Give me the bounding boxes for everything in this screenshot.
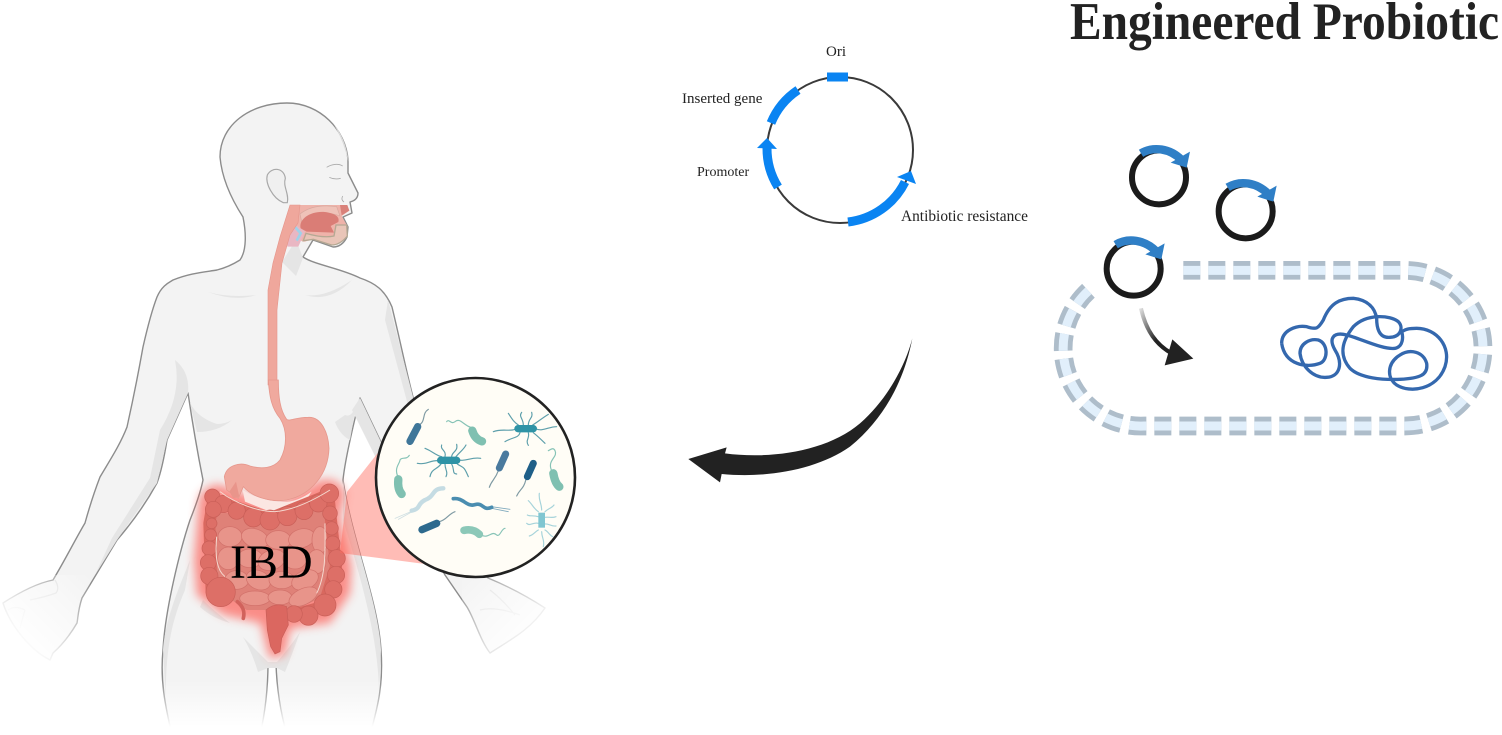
head shading (333, 123, 348, 162)
colon backing (209, 495, 336, 615)
panel: gut microbiome magnifier (376, 378, 575, 577)
bean bacterium 2 (548, 449, 559, 487)
bean bacterium 1 (447, 420, 482, 441)
magnifier cone (340, 440, 425, 564)
head details (267, 123, 349, 247)
rod bacterium 1 (410, 409, 428, 441)
plasmid 3 (1107, 240, 1165, 296)
jaw (303, 225, 347, 245)
tongue (300, 212, 339, 233)
colon (200, 484, 345, 625)
plasmid segments (767, 77, 905, 222)
large curved arrow (688, 338, 912, 482)
appendix (237, 602, 244, 618)
plasmid ring (767, 77, 913, 223)
small intestine (208, 510, 335, 610)
rod bacterium 4 (422, 512, 455, 530)
mouth and throat (290, 205, 349, 245)
rectum (266, 605, 288, 654)
panel: plasmid map (682, 44, 1028, 225)
label: Ori: Ori (826, 44, 846, 60)
larynx (287, 223, 305, 247)
stomach (224, 380, 329, 501)
pale peritrichous bacterium (527, 493, 556, 547)
panel: engineered bacterium (1063, 149, 1483, 426)
hand details (8, 580, 520, 628)
fade overlays (0, 575, 552, 735)
body shading (95, 240, 420, 700)
label: Antibiotic resistance: Antibiotic resistance (901, 208, 1028, 225)
body silhouette (3, 103, 545, 735)
digestive tract (194, 380, 352, 658)
promoter arrowhead (757, 138, 777, 149)
uptake arrow (1141, 308, 1193, 365)
peritrichous bacterium 2 (417, 444, 481, 477)
peritrichous bacterium 1 (493, 412, 557, 445)
bean bacterium 3 (396, 455, 409, 494)
plasmid 1 (1132, 149, 1190, 204)
plasmid 2 (1219, 183, 1277, 238)
bacteria (395, 409, 559, 547)
rod bacterium 3 (517, 463, 533, 496)
magnifier circle (376, 378, 575, 577)
blue spirochete (453, 499, 510, 512)
pale spirochete (395, 488, 443, 519)
gap beneath stomach (243, 490, 312, 512)
palate (300, 206, 340, 222)
bean bacterium 4 (464, 528, 505, 536)
IBD label: IBD (230, 536, 313, 589)
resistance arrowhead (897, 171, 916, 184)
rod bacterium 2 (489, 454, 506, 487)
chromosomal DNA (1282, 298, 1447, 389)
inflammation glow (194, 479, 352, 658)
face lines (327, 164, 344, 202)
panel: human body with IBD (0, 103, 552, 735)
lips (340, 205, 349, 215)
ear (267, 169, 288, 203)
esophagus (268, 205, 300, 385)
duodenum (229, 482, 239, 498)
taenia line (216, 490, 330, 593)
intestine lobes (218, 525, 328, 610)
label: Promoter: Promoter (697, 165, 749, 180)
membrane (1063, 270, 1483, 426)
label: Inserted gene: Inserted gene (682, 91, 763, 107)
